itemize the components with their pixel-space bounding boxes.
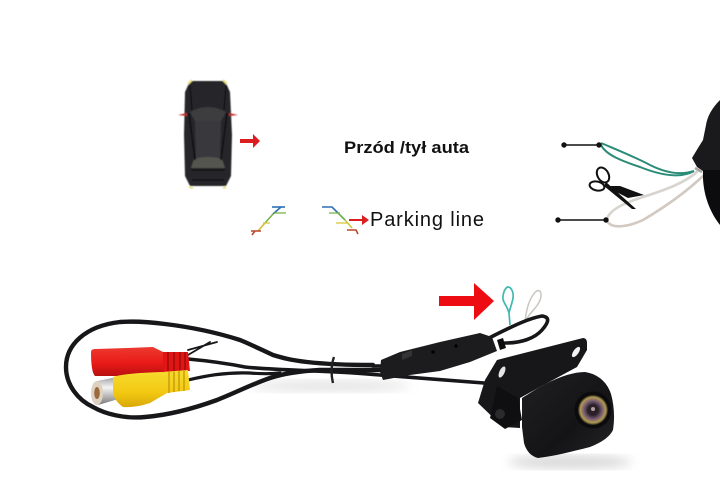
RCA plug: red — [91, 347, 190, 376]
white wires — [607, 171, 703, 226]
icon: scissors — [589, 165, 644, 209]
yellow connector cable — [188, 373, 280, 380]
icon: camera cable end with wires — [601, 100, 720, 226]
label: parking line: Parking line — [370, 209, 484, 231]
arrow: to parking line label — [349, 215, 369, 225]
metal tip — [97, 376, 122, 405]
icon: right parking line — [322, 207, 358, 234]
RCA plug: yellow — [91, 370, 190, 407]
red connector cable — [188, 359, 484, 383]
heading: front / rear of car: Przód /tył auta — [344, 138, 470, 157]
shadow — [508, 455, 632, 469]
icon: green wire loop — [503, 287, 513, 325]
camera — [478, 338, 632, 469]
icon: left parking line — [251, 207, 286, 235]
camera body — [522, 372, 614, 458]
mounting bracket — [478, 338, 587, 428]
green wires — [601, 143, 694, 175]
black cable housing — [692, 100, 720, 172]
icon: lower connection line — [555, 217, 609, 223]
side bolt — [490, 386, 522, 429]
upper cable to loop — [373, 316, 548, 366]
main cable loop — [66, 322, 380, 417]
icon: upper connection line — [561, 142, 602, 148]
arrow: large red arrow to wires — [439, 283, 494, 320]
camera cables — [66, 316, 548, 417]
cable shadow — [250, 380, 410, 392]
thin loose wires — [188, 342, 217, 355]
inline moulded junction — [380, 333, 506, 380]
tie ring on cable — [332, 357, 334, 383]
lens — [574, 392, 612, 428]
arrow: car to label — [240, 134, 260, 148]
bracket holes — [497, 365, 507, 379]
icon: white wire loop — [525, 290, 541, 322]
icon: car top view — [178, 80, 238, 188]
